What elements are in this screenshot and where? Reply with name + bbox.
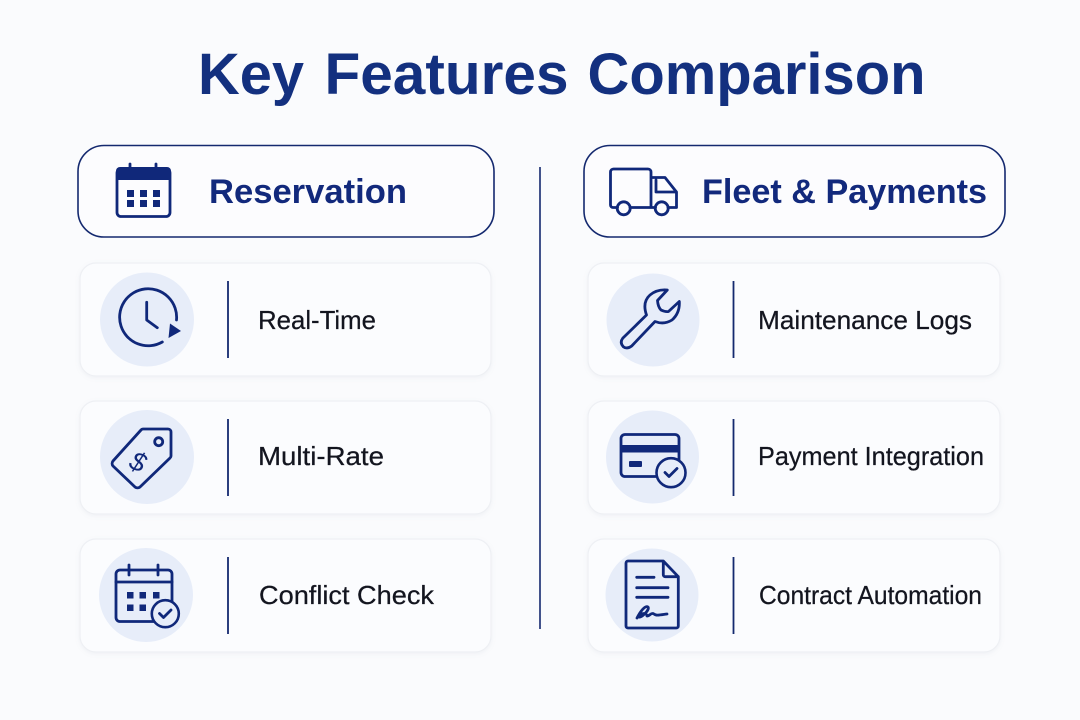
panel: fleet and payments column: [584, 146, 1005, 652]
label: multi-rate: Multi-Rate: [258, 441, 384, 471]
label: payment integration: Payment Integration: [758, 441, 984, 471]
card: multi-rate: [80, 401, 491, 514]
card: real-time: [80, 263, 491, 376]
icon: wrench: [621, 290, 679, 348]
title: Comparison: [588, 42, 926, 107]
icon: signed document: [626, 561, 678, 628]
card: payment integration: [588, 401, 1000, 514]
icon: credit card with check: [621, 434, 686, 487]
label: conflict check: Conflict Check: [259, 580, 435, 610]
header: fleet and payments: [584, 146, 1005, 237]
icon: clock: [120, 289, 181, 346]
center divider: [539, 167, 541, 629]
title: Features: [324, 42, 568, 107]
card: contract automation: [588, 539, 1000, 652]
label: maintenance logs: Maintenance Logs: [758, 305, 972, 335]
icon: calendar: [116, 164, 171, 216]
panel: reservation column: [78, 146, 494, 652]
icon: calendar with check: [116, 565, 179, 627]
heading: reservation: Reservation: [209, 173, 407, 211]
card: maintenance logs: [588, 263, 1000, 376]
title: [198, 42, 926, 107]
card: conflict check: [80, 539, 491, 652]
label: contract automation: Contract Automation: [759, 580, 982, 610]
icon: price tag: $: [124, 445, 151, 479]
icon: truck: [610, 169, 676, 215]
header: reservation: [78, 146, 494, 237]
label: real-time: Real-Time: [258, 305, 376, 335]
icon: price tag: [112, 429, 171, 488]
heading: fleet and payments: Fleet & Payments: [702, 173, 987, 211]
title: Key: [198, 42, 304, 107]
